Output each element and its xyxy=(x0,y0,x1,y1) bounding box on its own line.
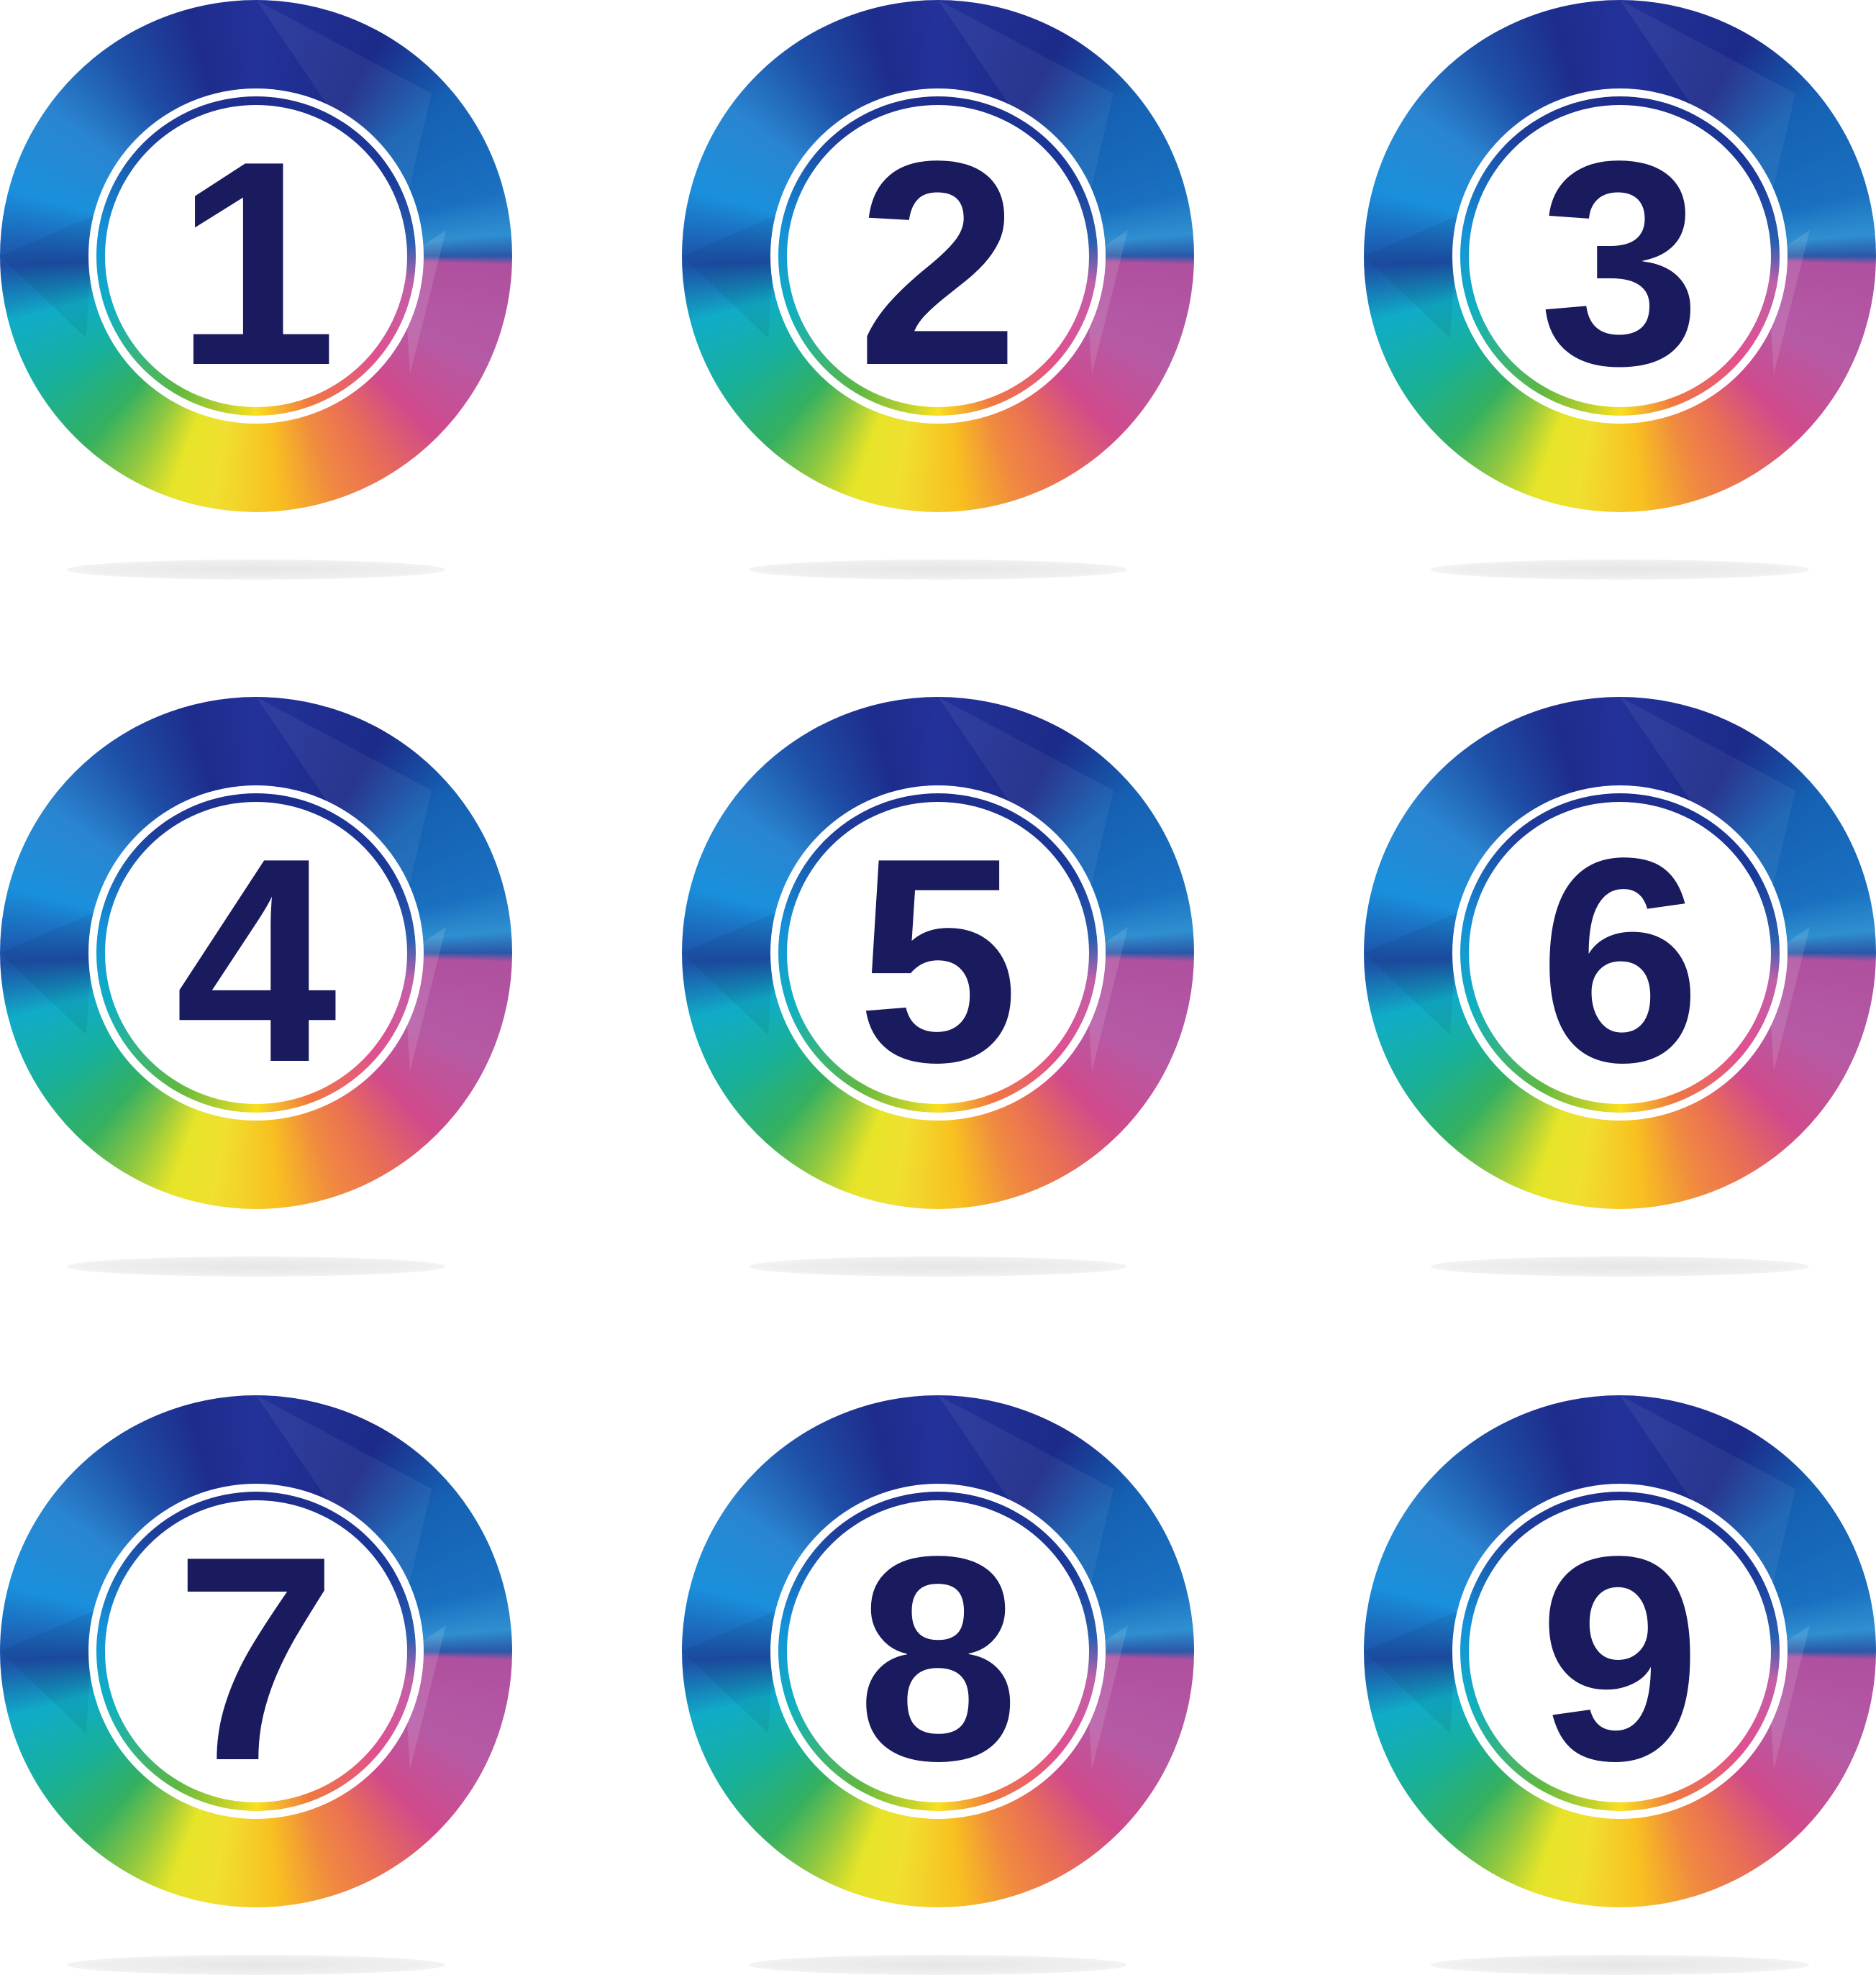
badge 2 xyxy=(682,0,1194,580)
number 8: 8 xyxy=(857,1495,1019,1821)
number 4: 4 xyxy=(175,797,337,1123)
number 3: 3 xyxy=(1539,100,1701,426)
number 9: 9 xyxy=(1539,1495,1701,1821)
badge 7 xyxy=(0,1395,512,1975)
badge 3 xyxy=(1364,0,1876,580)
badge 8 xyxy=(682,1395,1194,1975)
number 7: 7 xyxy=(175,1495,337,1821)
badge 5 xyxy=(682,697,1194,1277)
badge 4 xyxy=(0,697,512,1277)
number 6: 6 xyxy=(1539,797,1701,1123)
number 2: 2 xyxy=(857,100,1019,426)
badge 9 xyxy=(1364,1395,1876,1975)
badge 1 xyxy=(0,0,512,580)
number 1: 1 xyxy=(175,100,337,426)
badge 6 xyxy=(1364,697,1876,1277)
number 5: 5 xyxy=(857,797,1019,1123)
